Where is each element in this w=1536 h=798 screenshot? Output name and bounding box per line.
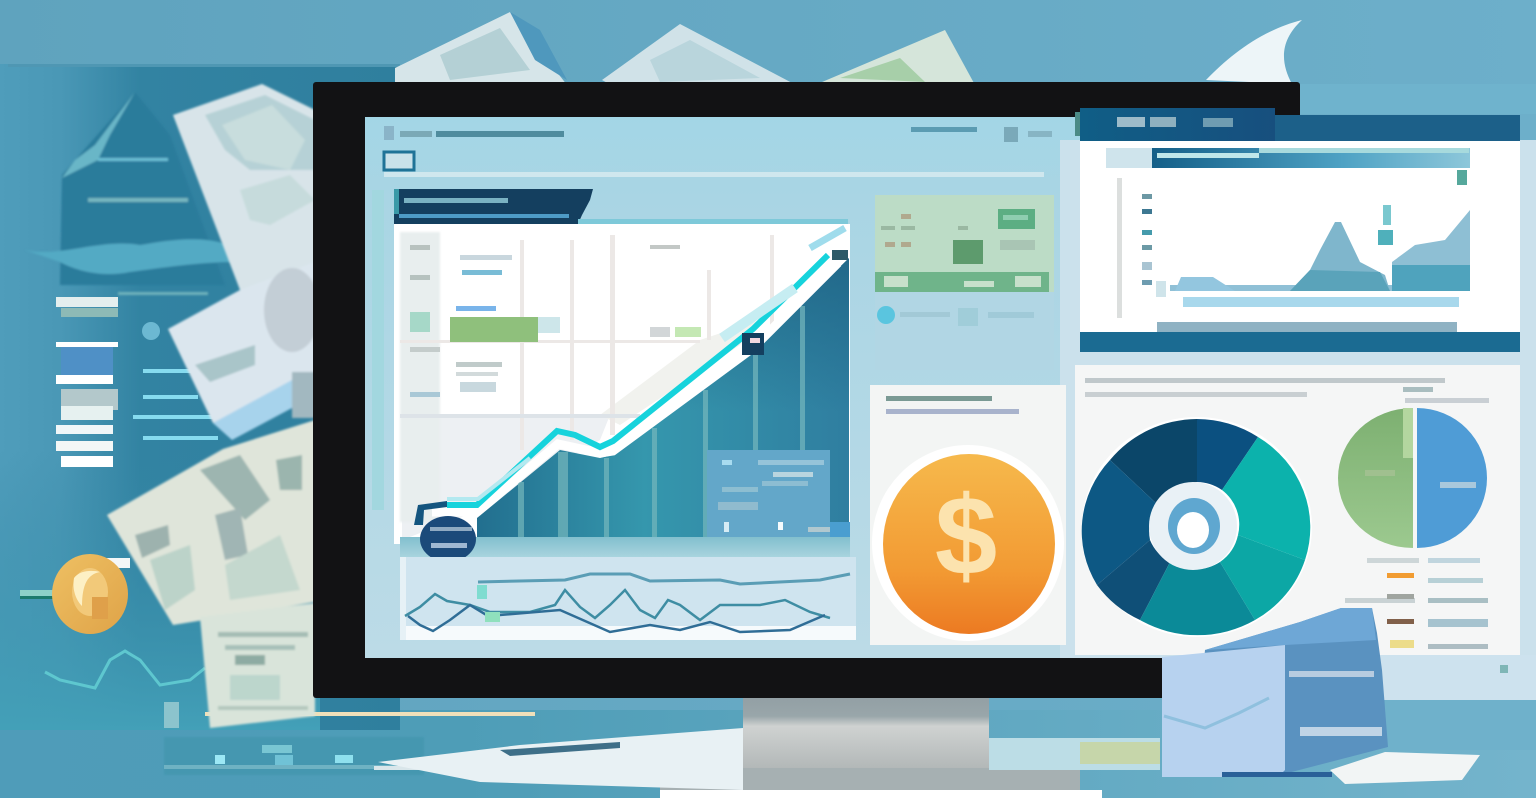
- panel: left backdrop chart: [0, 64, 400, 730]
- sidebar strip: [372, 190, 384, 510]
- panel: top right sky: [1300, 84, 1536, 114]
- green summary card: [875, 195, 1054, 292]
- area series: [477, 258, 849, 537]
- text: window title: [384, 126, 1052, 170]
- paper: bottom right sheet: [1330, 752, 1480, 784]
- chart background: [394, 224, 850, 544]
- chart: mountain with wave: [25, 92, 235, 295]
- monitor stand: [660, 696, 1102, 798]
- window header: [1075, 108, 1520, 141]
- panel: main line chart: [394, 189, 850, 562]
- axis: [1117, 178, 1152, 318]
- band under area: [1156, 281, 1459, 307]
- panel: bottom strip details: [164, 712, 535, 775]
- icon: orange dollar coin: $: [935, 473, 997, 598]
- table cells: [410, 245, 701, 397]
- legend: [1345, 558, 1488, 649]
- panel: area chart window: [1075, 108, 1520, 352]
- marker: peak dot: [742, 250, 848, 355]
- chart: lower sine line: [45, 651, 205, 688]
- heading bar: [394, 189, 848, 224]
- icon: blue folder: [1162, 608, 1388, 777]
- panel: donut and pie charts: [1075, 365, 1520, 655]
- text lines: white list: [56, 297, 118, 467]
- paper: banknote: [107, 420, 315, 625]
- text lines: [1085, 378, 1489, 403]
- area series: [1170, 170, 1470, 291]
- callout box: [707, 450, 850, 537]
- panel: coin card: [870, 385, 1066, 645]
- text lines: light blue: [133, 322, 218, 440]
- paper: top sheets: [395, 12, 975, 90]
- marker: start circle: [414, 501, 476, 562]
- paper: report two with chart glyph: [168, 262, 320, 440]
- window footer: [1080, 322, 1520, 352]
- icon: white crescent: [1206, 20, 1302, 84]
- icon: orange dollar coin: [872, 445, 1064, 641]
- line series: [432, 228, 845, 512]
- paper: statement: [200, 603, 315, 728]
- chart: lower wave sparkline: [400, 557, 856, 640]
- chart: donut: [1082, 417, 1312, 637]
- chart: pie: [1338, 408, 1487, 548]
- band under chart: [400, 537, 850, 557]
- paper: report one: [173, 84, 315, 300]
- monitor frame: [313, 82, 1300, 698]
- panel: KPI cards: [875, 195, 1054, 370]
- light stats card: [875, 292, 1054, 370]
- small dark tick: [1500, 665, 1508, 673]
- paper: left report sheets: [107, 84, 320, 728]
- icon: gold coin: [20, 554, 130, 634]
- inner title bar: [1106, 148, 1470, 168]
- monitor screen: [365, 117, 1536, 750]
- paper: under-monitor sheets: [378, 728, 1160, 790]
- text lines: [886, 396, 1019, 414]
